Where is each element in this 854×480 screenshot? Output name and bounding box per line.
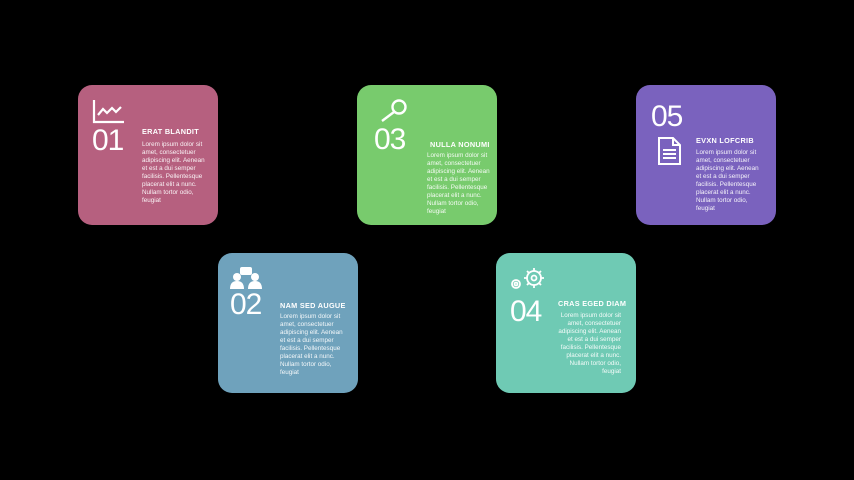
- title: CRAS EGED DIAM: [558, 299, 626, 308]
- title: ERAT BLANDIT: [142, 127, 199, 136]
- card 01: [78, 85, 218, 225]
- icon: magnifier: [381, 99, 407, 122]
- title: EVXN LOFCRIB: [696, 136, 754, 145]
- body text: Lorem ipsum dolor sit amet, consectetuer adipiscing elit. Aenean et est a dui semper facilisis. Pellentesque placerat elit a nunc. Nullam tortor odio, feugiat: [696, 149, 759, 212]
- body text: Lorem ipsum dolor sit amet, consectetuer adipiscing elit. Aenean et est a dui semper facilisis. Pellentesque placerat elit a nunc. Nullam tortor odio, feugiat: [427, 152, 490, 215]
- title: NULLA NONUMI: [430, 140, 490, 149]
- body text: Lorem ipsum dolor sit amet, consectetuer adipiscing elit. Aenean et est a dui semper facilisis. Pellentesque placerat elit a nunc. Nullam tortor odio, feugiat: [558, 312, 621, 375]
- number 02: 02: [230, 288, 261, 321]
- number 01: 01: [92, 124, 123, 157]
- icon: people: [230, 267, 262, 289]
- icon: document: [658, 137, 681, 165]
- body text: Lorem ipsum dolor sit amet, consectetuer adipiscing elit. Aenean et est a dui semper facilisis. Pellentesque placerat elit a nunc. Nullam tortor odio, feugiat: [280, 313, 343, 376]
- icon: line chart: [92, 100, 124, 124]
- icon: gears: [511, 268, 544, 289]
- number 03: 03: [374, 123, 405, 156]
- card 05: [636, 85, 776, 225]
- card 04: [496, 253, 636, 393]
- body text: Lorem ipsum dolor sit amet, consectetuer adipiscing elit. Aenean et est a dui semper facilisis. Pellentesque placerat elit a nunc. Nullam tortor odio, feugiat: [142, 141, 205, 204]
- number 05: 05: [651, 100, 682, 133]
- card 03: [357, 85, 497, 225]
- number 04: 04: [510, 295, 541, 328]
- card 02: [218, 253, 358, 393]
- title: NAM SED AUGUE: [280, 301, 346, 310]
